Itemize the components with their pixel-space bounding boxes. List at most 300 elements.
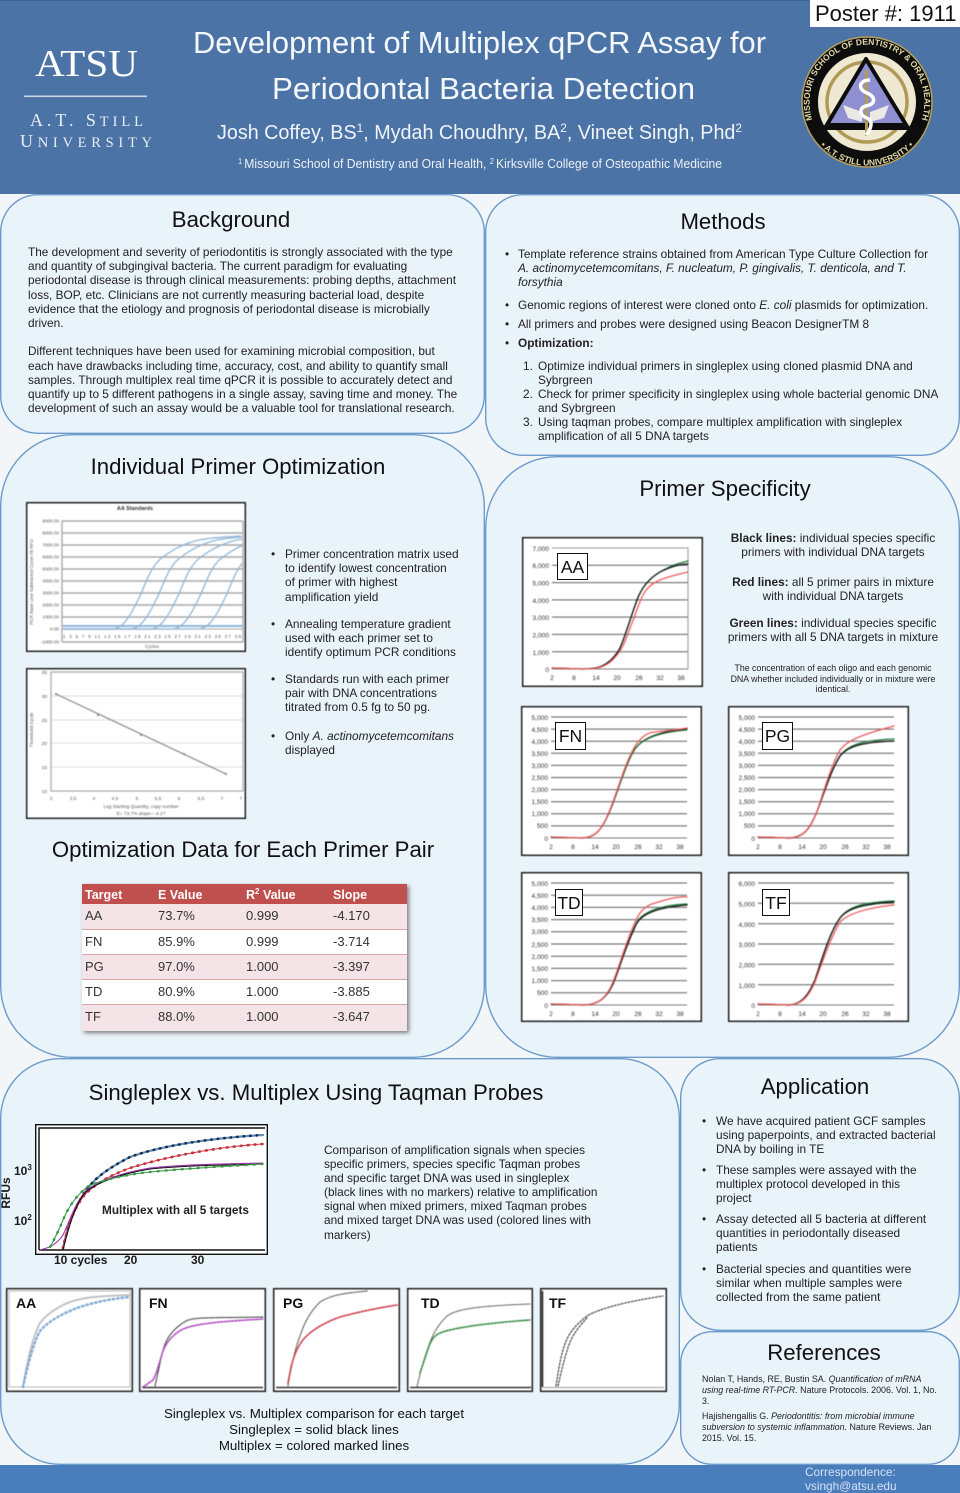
chart: standard curve threshold cycle vs log quantity: Threshold Cycle (29, 712, 35, 747)
chart: PG specificity: 26 (841, 844, 849, 851)
chart: standard curve threshold cycle vs log quantity: 3 (50, 796, 53, 802)
chart: PG specificity: 38 (883, 844, 891, 851)
table row PG: 1.000 (246, 959, 279, 974)
y-axis labels: 10 (14, 1164, 27, 1178)
table header: Slope (333, 888, 367, 902)
chart label FN: FN (559, 726, 582, 746)
emblem: Missouri School of Dentistry seal: • A.T. STILL UNIVERSITY • (822, 143, 912, 166)
bullet: patient samples: DNA by boiling in TE (716, 1142, 824, 1156)
chart: AA specificity: 26 (635, 675, 643, 682)
chart: standard curve threshold cycle vs log quantity: 15 (42, 765, 47, 771)
chart: standard curve threshold cycle vs log quantity: 3.5 (70, 796, 77, 802)
chart: AA singleplex vs multiplex (5, 1287, 134, 1393)
chart: AA specificity (521, 536, 704, 688)
table row AA (82, 904, 407, 930)
bullet: template strains (505, 247, 928, 289)
note: concentration: The concentration of each oligo and each genomic (734, 663, 932, 673)
y-axis labels (0, 1163, 32, 1228)
note: concentration (731, 663, 935, 694)
caption: singleplex vs multiplex comparison: Multiplex = colored marked lines (219, 1438, 409, 1453)
chart: AA specificity: 2 (550, 675, 554, 682)
numbered list: optimization steps: 3. (523, 415, 533, 429)
chart: PG specificity: 20 (819, 844, 827, 851)
table row PG: PG (85, 959, 104, 974)
heading: singleplex vs multiplex: Singleplex vs. Multiplex Using Taqman Probes (89, 1080, 543, 1105)
table row TF: 1.000 (246, 1009, 279, 1024)
table header: Target (85, 888, 122, 902)
chart: FN specificity: 32 (655, 844, 663, 851)
affiliations: 2 (490, 157, 496, 166)
chart: AA specificity: 20 (613, 675, 621, 682)
chart: AA specificity: 7,000 (532, 546, 549, 553)
legend text: green lines: Green lines: individual species specific (729, 616, 937, 630)
bullet: assay detected: Assay detected all 5 bacteria at different (716, 1212, 926, 1226)
chart: TF specificity: 4,000 (738, 922, 755, 929)
text block: background: loss, BOP, etc. Clinicians are not currently measuring bacterial load, despite (28, 288, 424, 302)
chart: PG specificity: 1,500 (738, 799, 755, 806)
bullet: species similar: collected from the same patient (716, 1290, 880, 1304)
numbered list: optimization steps: 1. (523, 359, 533, 373)
bullet list: primer optimization steps: to identify lowest concentration (285, 561, 447, 575)
chart: PG specificity: 2,000 (738, 787, 755, 794)
chart: TF specificity: 5,000 (738, 902, 755, 908)
table row FN (82, 930, 407, 955)
chart: standard curve threshold cycle vs log quantity: Log Starting Quantity, copy number (103, 804, 179, 810)
chart: TF specificity: 38 (883, 1011, 891, 1018)
chart: FN specificity: 2,500 (531, 775, 548, 782)
chart: FN specificity: 1,000 (531, 811, 548, 818)
chart: TF singleplex vs multiplex (539, 1287, 668, 1393)
chart: AA standards amplification curves: 0.00 (50, 626, 59, 632)
chart: AA specificity: 1,000 (532, 650, 549, 657)
chart: FN specificity: 14 (591, 844, 599, 851)
legend text: green lines (728, 616, 938, 644)
heading: methods: Methods (680, 209, 766, 234)
chart: standard curve threshold cycle vs log quantity: 35 (42, 670, 47, 676)
legend text: red lines (732, 575, 934, 603)
chart: TD specificity: 26 (634, 1011, 642, 1018)
chart: FN specificity: 2,000 (531, 787, 548, 794)
chart: TD specificity: 14 (591, 1011, 599, 1018)
text block: comparison description (324, 1143, 597, 1242)
bullet list: primer optimization steps: Primer concentration matrix used (285, 547, 459, 561)
chart: AA standards amplification curves: 2000.00 (42, 602, 59, 608)
x-axis labels: 30 (191, 1253, 205, 1267)
chart: standard curve threshold cycle vs log quantity: 5.5 (155, 796, 162, 802)
chart label FN (555, 722, 586, 750)
chart: TD specificity: 0 (544, 1003, 548, 1010)
chart: standard curve threshold cycle vs log quantity: 25 (42, 718, 47, 724)
panel: singleplex vs multiplex (0, 1058, 680, 1465)
bullet: annealing gradient: Annealing temperature gradient (285, 617, 451, 631)
bullet: optimization: Optimization: (518, 336, 594, 350)
chart: standard curve threshold cycle vs log quantity: 7 (221, 796, 224, 802)
chart: AA specificity: 6,000 (532, 563, 549, 570)
text block: background: development of such an assay would be a valuable tool for translational research. (28, 401, 455, 415)
chart: TD specificity: 3,500 (531, 917, 548, 924)
caption: singleplex vs multiplex comparison (164, 1406, 464, 1453)
logo: ATSU wordmark: ATSU (35, 43, 138, 85)
text block: background: driven. (28, 316, 64, 330)
chart: AA specificity: 4,000 (532, 598, 549, 605)
affiliations: 1 (238, 157, 244, 166)
logo: ATSU wordmark: U NIVERSITY (20, 131, 153, 151)
bullet: primers and probes: All primers and probes were designed using Beacon DesignerTM 8 (518, 317, 869, 331)
text block: background: evidence that the etiology and prognosis of periodontal disease is microbially (28, 302, 430, 316)
reference 1: using real-time RT-PCR. Nature Protocols. 2006. Vol. 1, No. (702, 1385, 937, 1395)
header banner (0, 0, 960, 194)
emblem: Missouri School of Dentistry seal (801, 36, 933, 168)
chart: standard curve threshold cycle vs log quantity: 20 (42, 741, 47, 747)
heading: optimization data: Optimization Data for Each Primer Pair (52, 837, 434, 862)
text block: background: The development and severity of periodontitis is strongly associated with the type (28, 245, 453, 259)
chart: standard curve threshold cycle vs log quantity: E= 73.7% slope= -4.17 (117, 811, 166, 817)
chart: TF specificity: 3,000 (738, 942, 755, 949)
chart: AA specificity: 3,000 (532, 615, 549, 622)
affiliations: Kirksville College of Osteopathic Medicine (496, 156, 722, 171)
correspondence contact (805, 1465, 897, 1493)
chart: standard curve threshold cycle vs log quantity: 5 (136, 796, 139, 802)
bullet: only AA displayed: • (271, 729, 275, 743)
text block: background: quantify up to 5 different pathogens in a single assay, saving time and money. The (28, 387, 457, 401)
numbered list: optimization steps: Optimize individual primers in singleplex using cloned plasmid DNA and (538, 359, 913, 373)
chart: TD specificity: 500 (537, 990, 548, 997)
chart: AA specificity: 8 (572, 675, 576, 682)
numbered list: optimization steps: and Sybrgreen (538, 401, 616, 415)
bullet: species similar (702, 1262, 911, 1304)
chart: standard curve threshold cycle vs log quantity: 4.5 (112, 796, 119, 802)
chart: AA standards amplification curves: 1000.00 (42, 614, 59, 620)
reference 2: Hajishengallis G. Periodontitis: from microbial immune (702, 1411, 915, 1421)
bullet: assay detected: quantities in periodontally diseased (716, 1226, 900, 1240)
chart: standard curve threshold cycle vs log quantity (25, 667, 247, 820)
bullet: assay detected: patients (716, 1240, 757, 1254)
bullet: annealing gradient: used with each primer set to (285, 631, 433, 645)
chart: PG singleplex vs multiplex (272, 1287, 401, 1393)
text block: background: and quantity of subgingival bacteria. The current paradigm for evaluating (28, 259, 407, 273)
title: Development of Multiplex qPCR Assay for (193, 25, 766, 60)
table row FN: -3.714 (333, 934, 370, 949)
chart label TF: TF (765, 893, 787, 913)
chart label TD: TD (421, 1295, 440, 1311)
chart: PG specificity: 2,500 (738, 775, 755, 782)
chart: TD specificity: 1,000 (531, 978, 548, 985)
legend text: line colour meanings: primers with individual DNA targets (741, 545, 925, 559)
table header (82, 884, 407, 904)
correspondence contact: vsingh@atsu.edu (805, 1479, 897, 1493)
y-axis labels: 3 (27, 1163, 32, 1172)
bullet: patient samples: • (702, 1114, 706, 1128)
table row TF: -3.647 (333, 1009, 370, 1024)
chart: standard curve threshold cycle vs log quantity: 7 (240, 796, 243, 802)
table header: E Value (158, 888, 202, 902)
panel: individual primer optimization (0, 434, 485, 1058)
bullet: standards: Standards run with each primer (285, 672, 449, 686)
heading: individual primer optimization: Individual Primer Optimization (91, 454, 385, 479)
reference 1: Nolan T, Hands, RE, Bustin SA. Quantification of mRNA (702, 1374, 921, 1384)
chart: TF specificity: 0 (751, 1003, 755, 1010)
chart: PG specificity: 8 (778, 844, 782, 851)
emblem: Missouri School of Dentistry seal: MISSOURI SCHOOL OF DENTISTRY & ORAL HEALTH (804, 38, 930, 121)
bullet list: primer optimization steps: • (271, 547, 275, 561)
text block: comparison description: Comparison of amplification signals when species (324, 1143, 585, 1157)
chart: TD specificity: 32 (655, 1011, 663, 1018)
chart: TF specificity: 20 (819, 1011, 827, 1018)
title: Periodontal Bacteria Detection (272, 71, 695, 106)
text block: background: Different techniques have been used for examining microbial composition, but (28, 344, 435, 358)
chart: TD singleplex vs multiplex (406, 1287, 534, 1393)
bullet: template strains: • (505, 247, 509, 261)
bullet: assayed samples: • (702, 1163, 706, 1177)
note: concentration: DNA whether included individually or in mixture were (731, 674, 935, 684)
chart: TD specificity: 4,000 (531, 905, 548, 912)
heading: background: Background (172, 207, 290, 232)
authors: 2 (560, 121, 567, 135)
chart: TD specificity: 38 (676, 1011, 684, 1018)
authors: , Mydah Choudhry, BA (363, 122, 561, 144)
chart: PG specificity: 0 (751, 836, 755, 843)
bullet list: primer optimization steps: amplification yield (285, 590, 378, 604)
panel: primer specificity (485, 456, 960, 1058)
chart: AA specificity: 0 (545, 667, 549, 674)
chart: standard curve threshold cycle vs log quantity: 4 (93, 796, 96, 802)
y-axis labels: 10 (14, 1214, 27, 1228)
x-axis labels: 10 cycles (54, 1253, 108, 1267)
numbered list: optimization steps: amplification of all 5 DNA targets (538, 429, 709, 443)
bullet: template strains: forsythia (518, 275, 563, 289)
chart: standard curve threshold cycle vs log quantity: 6.5 (198, 796, 205, 802)
chart: PG specificity: 32 (862, 844, 870, 851)
chart annotation: Multiplex with all 5 targets (102, 1203, 249, 1217)
chart label TD: TD (557, 893, 581, 913)
note: concentration: identical. (816, 684, 850, 694)
chart: AA standards amplification curves: Cycles (145, 644, 160, 649)
chart: FN specificity: 0 (544, 836, 548, 843)
bullet: standards: titrated from 0.5 fg to 50 pg. (285, 700, 430, 714)
numbered list: optimization steps: Check for primer specificity in singleplex using whole bacterial genomic DNA (538, 387, 938, 401)
chart: AA standards amplification curves: 7000.00 (42, 542, 59, 548)
chart: AA specificity: 32 (656, 675, 664, 682)
bullet: assayed samples (702, 1163, 917, 1205)
chart: AA standards amplification curves: PCR Base Line Subtracted Curve Fit RFU (29, 539, 34, 625)
text block: comparison description: signal when mixed primers, mixed Taqman probes (324, 1199, 587, 1213)
table row AA: 0.999 (246, 908, 279, 923)
chart label TD (555, 889, 583, 916)
table row TF (82, 1005, 407, 1031)
reference 2: 2015. Vol. 15. (702, 1433, 756, 1443)
legend text: green lines: primers with all 5 DNA targets in mixture (728, 630, 938, 644)
chart: AA standards amplification curves: 8000.00 (42, 530, 59, 536)
bullet: template strains: Template reference strains obtained from American Type Culture Collection for (518, 247, 928, 261)
affiliations: Missouri School of Dentistry and Oral Health, (244, 156, 490, 171)
text block: comparison description: and mixed target DNA was used (colored lines with (324, 1213, 591, 1227)
table row TD (82, 980, 407, 1005)
table row AA: -4.170 (333, 908, 370, 923)
bullet: species similar: • (702, 1262, 706, 1276)
table row TD: 80.9% (158, 984, 195, 999)
chart: TF specificity: 2 (756, 1011, 760, 1018)
chart: TD specificity: 2 (549, 1011, 553, 1018)
bullet: patient samples: using paperpoints, and extracted bacterial (716, 1128, 936, 1142)
table header: R2 Value (246, 887, 296, 902)
legend text: line colour meanings: Black lines: individual species specific (731, 531, 935, 545)
bullet: assay detected: • (702, 1212, 706, 1226)
chart: TF specificity: 32 (862, 1011, 870, 1018)
bullet: optimization: • (505, 336, 509, 350)
footer bar (0, 1465, 960, 1493)
reference 1: 3. (702, 1396, 709, 1406)
bullet: annealing gradient (271, 617, 456, 659)
reference 2 (702, 1411, 931, 1443)
table row AA: AA (85, 908, 102, 923)
chart: multiplex with all 5 targets (0, 1124, 268, 1267)
bullet: annealing gradient: identify optimum PCR conditions (285, 645, 456, 659)
text block: background: each have drawbacks including time, accuracy, cost, and ability to quantify small (28, 359, 448, 373)
chart: TF specificity: 26 (841, 1011, 849, 1018)
numbered list: optimization steps: Sybrgreen (538, 373, 593, 387)
bullet: standards: pair with DNA concentrations (285, 686, 437, 700)
chart: AA standards amplification curves: AA Standards (117, 506, 153, 512)
bullet: assayed samples: These samples were assayed with the (716, 1163, 917, 1177)
legend text: line colour meanings (731, 531, 935, 559)
panel: methods (485, 194, 960, 456)
table row FN: FN (85, 934, 102, 949)
legend text: red lines: with individual DNA targets (763, 589, 903, 603)
chart: TF specificity: 6,000 (738, 881, 755, 888)
table row FN: 0.999 (246, 934, 279, 949)
text block: comparison description: specific primers, species specific Taqman probes (324, 1157, 580, 1171)
table: optimization data (82, 884, 407, 1031)
reference 1 (702, 1374, 937, 1406)
chart: AA specificity: 38 (677, 675, 685, 682)
chart: TD specificity: 20 (612, 1011, 620, 1018)
chart: standard curve threshold cycle vs log quantity: 10 (42, 789, 47, 795)
table row TF: 88.0% (158, 1009, 195, 1024)
chart: PG specificity: 4,000 (738, 739, 755, 746)
chart: PG specificity: 1,000 (738, 811, 755, 818)
bullet: patient samples (702, 1114, 936, 1156)
bullet list: primer optimization steps (271, 547, 459, 604)
authors: Josh Coffey, BS (217, 122, 359, 144)
table row TD: TD (85, 984, 102, 999)
numbered list: optimization steps (523, 359, 938, 443)
legend text: red lines: Red lines: all 5 primer pairs in mixture (732, 575, 934, 589)
chart: AA standards amplification curves: 5000.00 (42, 566, 59, 572)
chart: AA standards amplification curves (25, 501, 247, 653)
table row FN: 85.9% (158, 934, 195, 949)
text block: background: samples. Through multiplex real time qPCR it is possible to accurately detect and (28, 373, 452, 387)
chart: AA standards amplification curves: 3000.00 (42, 590, 59, 596)
chart: FN singleplex vs multiplex (138, 1287, 267, 1393)
chart: FN specificity: 2 (549, 844, 553, 851)
bullet: only AA displayed: Only A. actinomycetemcomitans (285, 729, 454, 743)
chart: AA specificity: 2,000 (532, 632, 549, 640)
chart label PG: PG (283, 1295, 303, 1311)
chart: AA standards amplification curves: 9000.00 (42, 518, 59, 524)
bullet: assay detected (702, 1212, 926, 1254)
chart: TF specificity: 1,000 (738, 983, 755, 990)
chart: TD specificity: 2,500 (531, 942, 548, 949)
chart: PG specificity: 500 (744, 823, 755, 830)
chart: FN specificity: 500 (537, 823, 548, 830)
bullet: patient samples: We have acquired patient GCF samples (716, 1114, 926, 1128)
bullet: genomic regions: Genomic regions of interest were cloned onto E. coli plasmids for optimization. (518, 298, 928, 312)
chart: FN specificity: 8 (571, 844, 575, 851)
authors: 1 (357, 121, 364, 135)
chart: AA standards amplification curves: 1 3 5 7 9 11 13 15 17 19 21 23 25 27 29 31 33 35 37 39 (63, 634, 241, 639)
chart: FN specificity: 20 (612, 844, 620, 851)
chart: PG specificity: 3,500 (738, 751, 755, 758)
chart: TF specificity: 8 (778, 1011, 782, 1018)
x-axis labels (54, 1253, 205, 1267)
chart: FN specificity: 4,500 (531, 727, 548, 734)
text block: comparison description: markers) (324, 1228, 371, 1242)
table row TF: TF (85, 1009, 101, 1024)
caption: singleplex vs multiplex comparison: Singleplex vs. Multiplex comparison for each target (164, 1406, 464, 1421)
chart: TD specificity: 2,000 (531, 954, 548, 961)
chart label TF (762, 889, 790, 916)
chart: TD specificity (520, 871, 703, 1023)
chart: FN specificity: 1,500 (531, 799, 548, 806)
numbered list: optimization steps: 2. (523, 387, 533, 401)
text block: background (28, 245, 457, 415)
bullet: only AA displayed: displayed (285, 743, 335, 757)
chart label FN: FN (149, 1295, 168, 1311)
chart label TF: TF (549, 1295, 566, 1311)
chart label PG: PG (765, 726, 790, 746)
text block: background: periodontal disease is through clinical measurements: probing depths, attachment (28, 273, 456, 287)
bullet: genomic regions: • (505, 298, 509, 312)
chart: FN specificity: 3,000 (531, 763, 548, 770)
chart: FN specificity: 5,000 (531, 715, 548, 722)
table row PG: 97.0% (158, 959, 195, 974)
chart: FN specificity: 38 (676, 844, 684, 851)
chart: PG specificity: 14 (798, 844, 806, 851)
panel: references (680, 1331, 960, 1465)
x-axis labels: 20 (124, 1253, 138, 1267)
chart: standard curve threshold cycle vs log quantity: 6 (178, 796, 181, 802)
chart: TF specificity: 14 (798, 1011, 806, 1018)
table row AA: 73.7% (158, 908, 195, 923)
bullet: primers and probes: • (505, 317, 509, 331)
bullet: species similar: similar when multiple samples were (716, 1276, 902, 1290)
chart: TD specificity: 5,000 (531, 881, 548, 888)
chart label AA: AA (16, 1295, 36, 1311)
chart: AA specificity: 5,000 (532, 580, 549, 588)
bullet: assayed samples: multiplex protocol developed in this (716, 1177, 900, 1191)
text block: comparison description: and specific target DNA was used in singleplex (324, 1171, 569, 1185)
bullet: assayed samples: project (716, 1191, 752, 1205)
caption: singleplex vs multiplex comparison: Singleplex = solid black lines (229, 1422, 399, 1437)
chart: FN specificity: 4,000 (531, 739, 548, 746)
chart: FN specificity: 26 (634, 844, 642, 851)
y-axis labels: 2 (27, 1213, 32, 1222)
logo: ATSU wordmark (20, 43, 153, 151)
chart: FN specificity (520, 705, 703, 857)
chart: AA standards amplification curves: 4000.00 (42, 578, 59, 584)
chart: AA specificity: 14 (592, 675, 600, 682)
correspondence contact: Correspondence: (805, 1465, 896, 1479)
authors: 2 (735, 121, 742, 135)
heading: application: Application (761, 1074, 869, 1099)
chart: TD specificity: 4,500 (531, 893, 548, 900)
table row PG: -3.397 (333, 959, 370, 974)
panel: application (680, 1058, 960, 1331)
bullet: standards (271, 672, 450, 714)
chart label AA (557, 553, 588, 580)
bullet: annealing gradient: • (271, 617, 275, 631)
chart: PG specificity: 3,000 (738, 763, 755, 770)
